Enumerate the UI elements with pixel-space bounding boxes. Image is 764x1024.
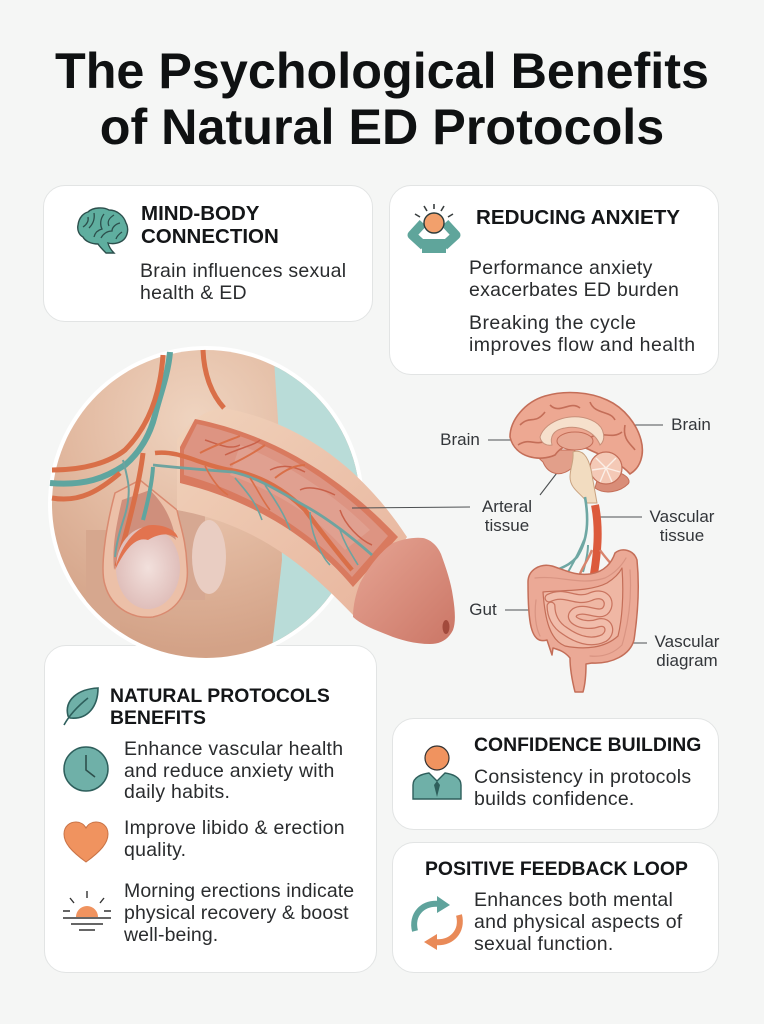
text block bbox=[124, 738, 343, 803]
label: Brain left: Brain bbox=[440, 430, 480, 449]
text block bbox=[474, 889, 682, 955]
icon: leaf bbox=[63, 687, 99, 726]
heading: REDUCING ANXIETY bbox=[476, 206, 680, 229]
text block: breaking the cycle bbox=[469, 312, 696, 356]
testicle bbox=[115, 525, 180, 609]
label: Vascular diagram bbox=[654, 632, 720, 670]
panel: natural protocols benefits bbox=[44, 645, 377, 973]
text block: quality. bbox=[124, 839, 186, 861]
text block bbox=[140, 260, 346, 304]
text block: Brain influences sexual bbox=[140, 260, 346, 282]
text block: performance anxiety bbox=[469, 257, 679, 301]
text block bbox=[124, 880, 354, 946]
label: Arterial tissue: tissue bbox=[485, 516, 529, 535]
circle background bbox=[52, 350, 358, 658]
text block: Improve libido & erection bbox=[124, 817, 345, 839]
panel: reducing anxiety bbox=[389, 185, 719, 375]
icon: heart bbox=[64, 822, 108, 862]
text block: Morning erections indicate bbox=[124, 880, 354, 902]
scrotum bbox=[103, 480, 187, 617]
text block: and physical aspects of bbox=[474, 911, 682, 933]
label: Vascular diagram: Vascular bbox=[655, 632, 719, 651]
heading bbox=[141, 202, 279, 248]
text block: Enhance vascular health bbox=[124, 738, 343, 760]
vessels bbox=[557, 497, 612, 574]
heading: MIND-BODY bbox=[141, 202, 259, 225]
intestines bbox=[528, 550, 638, 692]
title bbox=[55, 42, 709, 155]
icon: cycle arrows bbox=[411, 896, 463, 950]
label: Gut: Gut bbox=[469, 600, 497, 619]
label: Vascular tissue bbox=[650, 507, 714, 545]
text block: breaking the cycle: Breaking the cycle bbox=[469, 312, 636, 334]
panel: mind-body connection bbox=[43, 185, 373, 322]
title: The Psychological Benefits bbox=[55, 42, 709, 99]
text block: performance anxiety: Performance anxiety bbox=[469, 257, 653, 279]
text block: well-being. bbox=[124, 924, 218, 946]
heading: NATURAL PROTOCOLS bbox=[110, 685, 330, 707]
brain bbox=[510, 393, 642, 503]
heading: CONFIDENCE BUILDING bbox=[474, 734, 701, 756]
label: Vascular tissue: tissue bbox=[660, 526, 704, 545]
anatomical illustration bbox=[48, 346, 663, 658]
text block: sexual function. bbox=[474, 933, 614, 955]
label: Arterial tissue: Arteral bbox=[482, 497, 532, 516]
vessels bbox=[50, 350, 372, 570]
label: Vascular tissue: Vascular bbox=[650, 507, 714, 526]
text block: breaking the cycle: improves flow and health bbox=[469, 334, 696, 356]
icon: stressed person bbox=[408, 204, 460, 253]
text block: performance anxiety: exacerbates ED burden bbox=[469, 279, 679, 301]
heading: POSITIVE FEEDBACK LOOP bbox=[425, 858, 688, 880]
panel: confidence building bbox=[392, 718, 719, 830]
text block: Enhances both mental bbox=[474, 889, 673, 911]
icon: clock bbox=[63, 746, 109, 792]
text block: physical recovery & boost bbox=[124, 902, 349, 924]
text block bbox=[474, 766, 691, 810]
title: of Natural ED Protocols bbox=[100, 98, 664, 155]
shaft bbox=[177, 408, 407, 617]
panel: positive feedback loop bbox=[392, 842, 719, 973]
glans bbox=[353, 538, 455, 644]
text block: Consistency in protocols bbox=[474, 766, 691, 788]
leader lines bbox=[352, 425, 663, 643]
text block: builds confidence. bbox=[474, 788, 635, 810]
text block: health & ED bbox=[140, 282, 247, 304]
second testicle and tissue bbox=[177, 510, 226, 600]
text block: daily habits. bbox=[124, 781, 230, 803]
text block: and reduce anxiety with bbox=[124, 760, 335, 782]
heading bbox=[110, 685, 330, 729]
heading: BENEFITS bbox=[110, 707, 206, 729]
label: Brain right: Brain bbox=[671, 415, 711, 434]
icon: sunrise bbox=[63, 891, 111, 931]
icon: brain bbox=[77, 207, 128, 254]
icon: person bbox=[412, 745, 462, 800]
label: Vascular diagram: diagram bbox=[656, 651, 718, 670]
heading: CONNECTION bbox=[141, 225, 279, 248]
label: Arterial tissue bbox=[482, 497, 532, 535]
text block bbox=[124, 817, 345, 861]
